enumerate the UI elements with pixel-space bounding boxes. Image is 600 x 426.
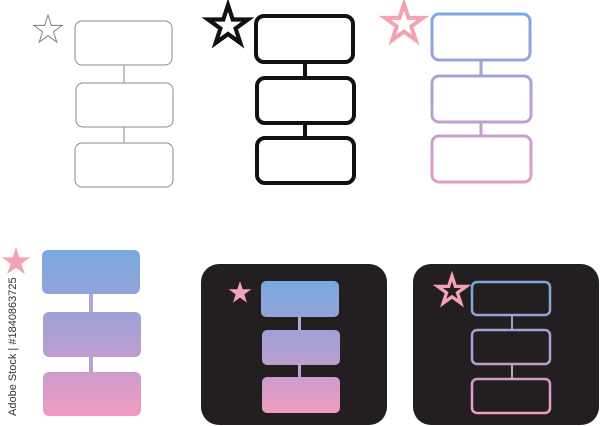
icon: bold black flowchart: [208, 5, 354, 183]
icon: thin outline flowchart: [34, 15, 173, 187]
watermark caption: Adobe Stock | #1840863725: [7, 277, 19, 416]
icon: pink star: [229, 281, 251, 303]
icon: filled gradient flowchart: [2, 247, 141, 416]
icon: thin star: [34, 15, 62, 42]
panel: dark with filled flowchart: [201, 264, 387, 425]
icon: gradient outline flowchart: [385, 4, 531, 182]
icon: bold star: [208, 5, 248, 43]
icon: pink filled star: [2, 247, 30, 274]
icon: pink outline star: [385, 4, 423, 40]
panel: dark with outline flowchart: [413, 264, 599, 425]
icon: pink outline star: [438, 276, 466, 303]
